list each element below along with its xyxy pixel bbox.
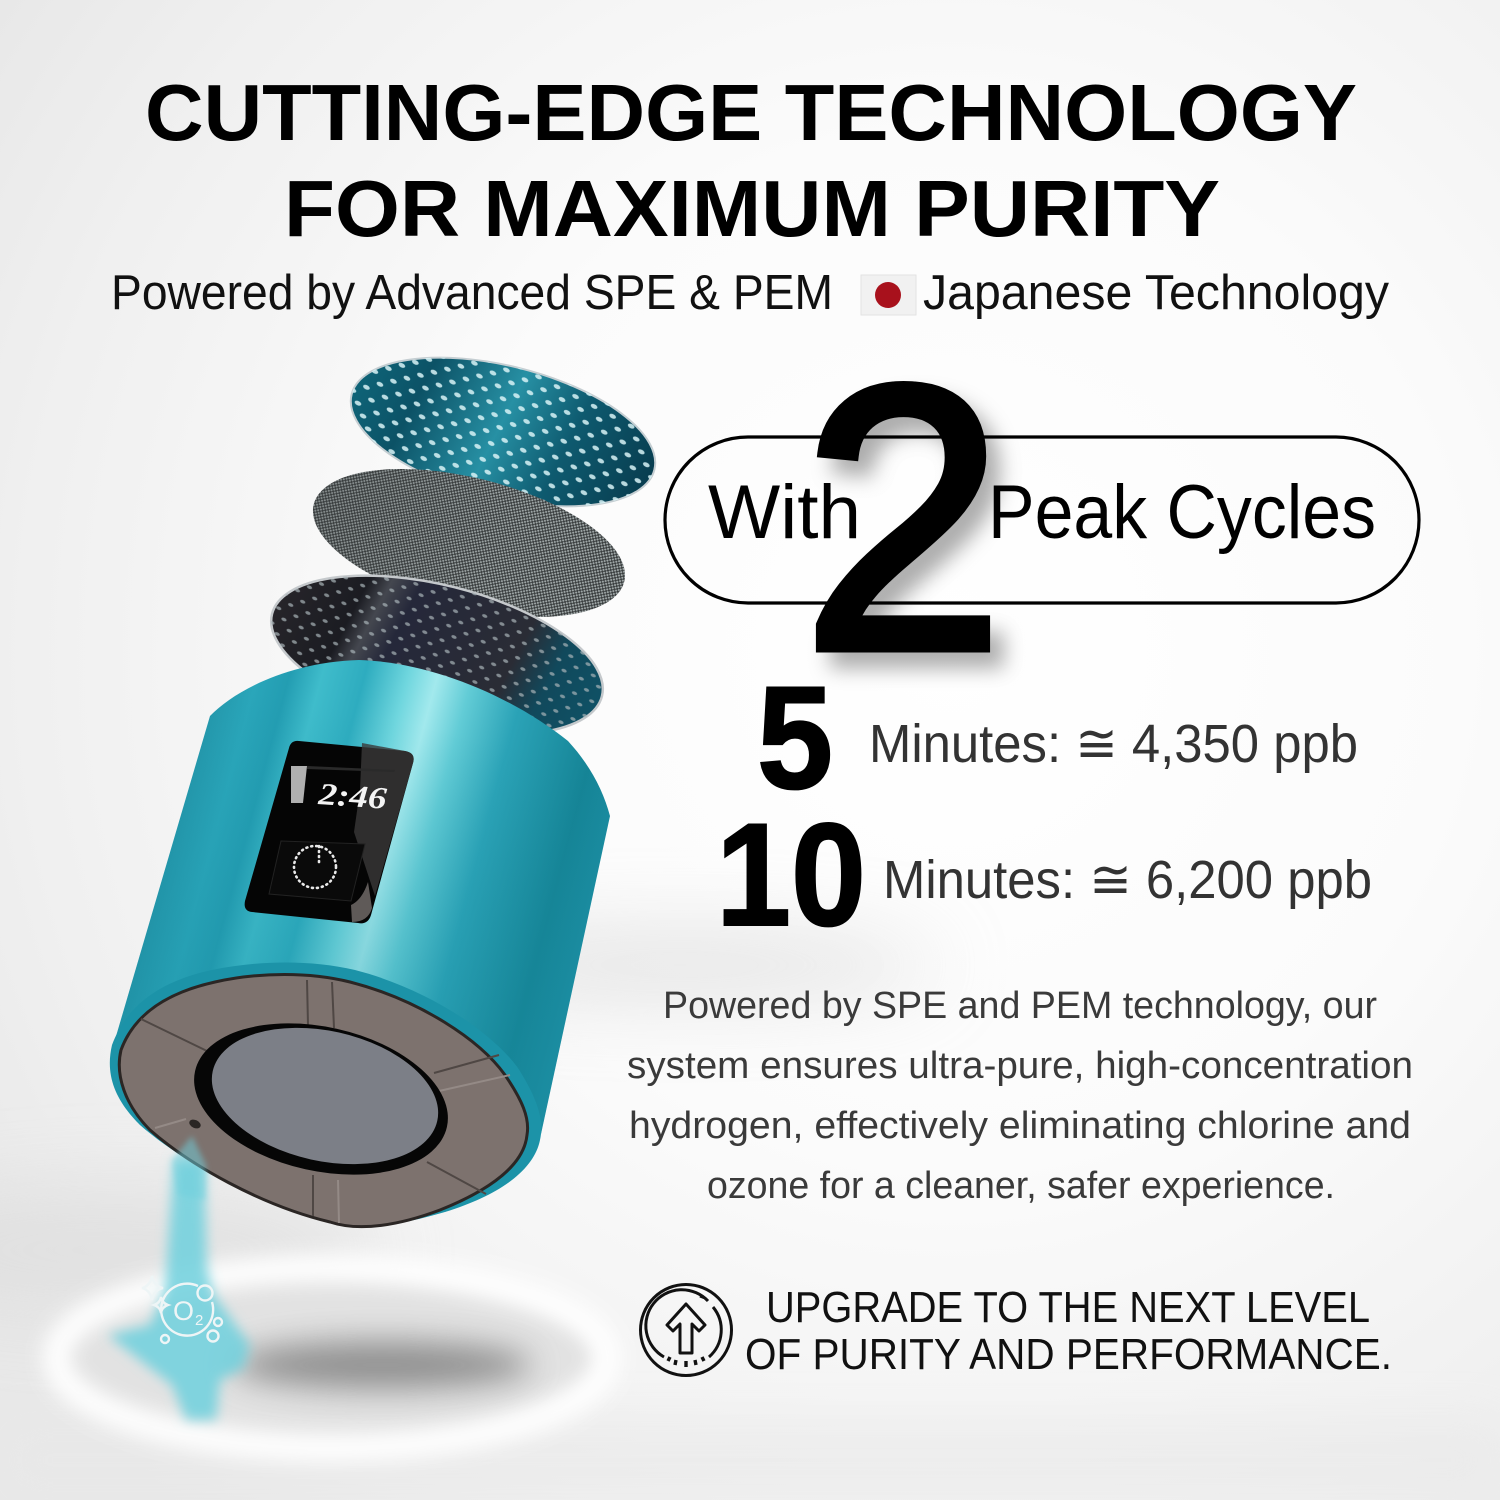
product illustration: exploded electrode discs and cell [108,330,670,1420]
display panel [245,741,414,923]
title [145,68,1357,253]
disc: teal perforated plate [350,356,656,508]
icon: japanese flag [861,275,916,315]
description paragraph: hydrogen, effectively eliminating chlorine and [629,1105,1411,1147]
subtitle: Powered by Advanced SPE & PEM [111,266,833,320]
icon: power button [294,846,336,888]
call to action: OF PURITY AND PERFORMANCE. [745,1330,1392,1379]
disc: dark perforated plate [270,574,604,731]
title: CUTTING-EDGE TECHNOLOGY [145,68,1357,157]
stat: 10 minutes [716,793,1372,956]
description paragraph: ozone for a cleaner, safer experience. [707,1165,1335,1207]
icon: oxygen molecule: 2 [195,1312,203,1329]
stat: 10 minutes: 10 [716,793,866,956]
clock readout: 2:46 [316,776,388,816]
end cap ring [110,962,541,1227]
hydrogen stream [108,1160,250,1420]
stat: 5 minutes: 5 [757,656,833,819]
stat: 5 minutes: Minutes: ≅ 4,350 ppb [869,714,1358,774]
stat: 5 minutes [757,656,1358,819]
big numeral 2: 2 [802,308,1004,728]
outlet hole [188,1118,202,1130]
pill: with 2 peak cycles: Peak Cycles [988,470,1376,555]
description paragraph [627,985,1413,1207]
icon: oxygen molecule [142,1276,222,1343]
icon: upgrade arrow badge [640,1284,732,1376]
subtitle [111,266,1389,320]
icon: oxygen molecule: O [173,1296,194,1326]
stat: 10 minutes: Minutes: ≅ 6,200 ppb [883,850,1372,910]
pill: with 2 peak cycles [665,308,1419,728]
stream over cap [172,1136,206,1200]
disc: grey mesh [298,441,640,645]
call to action [745,1283,1392,1379]
floor pool with shadow and white ring [56,1268,608,1448]
pill: with 2 peak cycles: With [708,470,861,555]
description paragraph: Powered by SPE and PEM technology, our [663,985,1377,1027]
subtitle: Japanese Technology [923,266,1389,320]
cylinder body [112,660,610,1212]
description paragraph: system ensures ultra-pure, high-concentration [627,1045,1413,1087]
title: FOR MAXIMUM PURITY [284,164,1220,253]
electrode disc [179,1001,463,1197]
call to action: UPGRADE TO THE NEXT LEVEL [766,1283,1370,1332]
